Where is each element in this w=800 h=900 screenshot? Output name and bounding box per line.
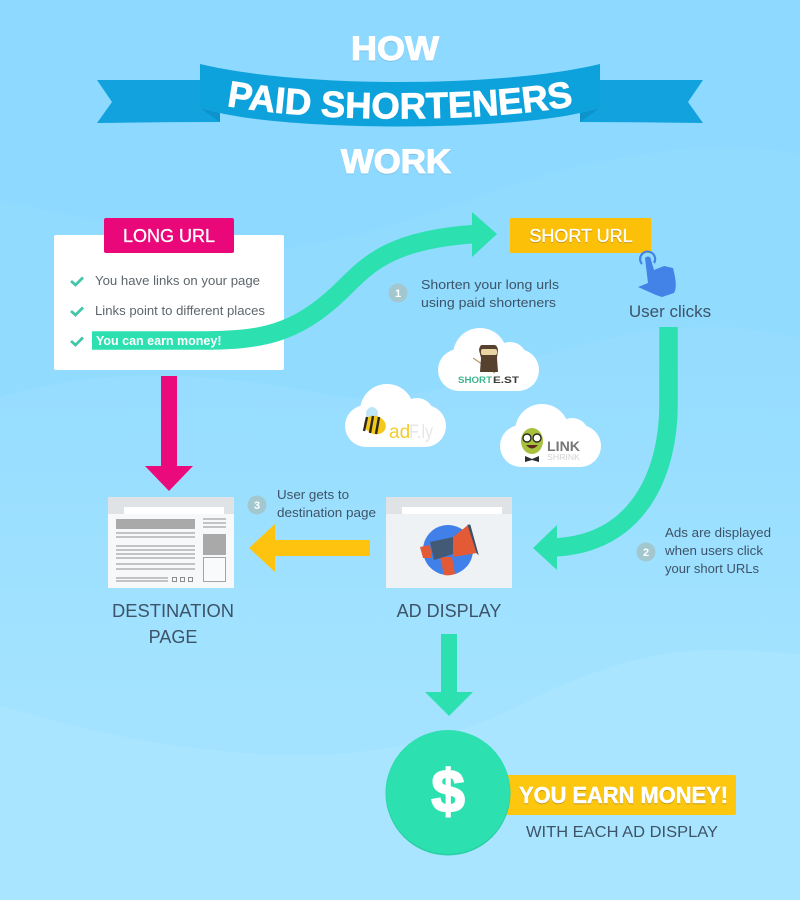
step 3 note: destination page	[277, 505, 376, 520]
coin: dollar	[386, 730, 510, 856]
cloud: adf.ly	[345, 384, 446, 447]
step 1 note: Shorten your long urls	[421, 277, 560, 292]
cloud: adf.ly: ad	[389, 422, 410, 443]
step 2 note	[636, 525, 771, 576]
step 3 note: User gets to	[277, 487, 349, 502]
highlight text: You can earn money!	[96, 334, 222, 348]
icon: tapping hand	[638, 252, 676, 297]
cloud: shorte.st: E.ST	[493, 375, 519, 386]
title: PAID SHORTENERS: PAID SHORTENERS	[228, 81, 572, 120]
label: destination page	[112, 601, 234, 647]
step 2 note: when users click	[664, 543, 764, 558]
text: user clicks: User clicks	[629, 302, 711, 321]
step 1 note	[388, 277, 560, 310]
text: with each ad display: WITH EACH AD DISPLAY	[526, 824, 718, 841]
check list item 2: Links point to different places	[95, 303, 265, 318]
step 3 note	[248, 487, 376, 520]
arrow: long URL to short URL	[92, 212, 497, 340]
step 2 note: Ads are displayed	[665, 525, 771, 540]
cloud: shorte.st: SHORT	[458, 375, 492, 386]
step 2 note: your short URLs	[665, 561, 759, 576]
banner: you earn money: YOU EARN MONEY!	[519, 782, 728, 808]
banner: you earn money	[500, 775, 736, 815]
arrow: ad display to destination	[249, 524, 370, 572]
cloud: linkshrink	[500, 404, 601, 467]
label: destination page: PAGE	[149, 627, 197, 647]
cloud: linkshrink: LINK	[547, 438, 580, 454]
panel: destination page browser	[108, 497, 234, 588]
step 1 note: 1	[395, 288, 401, 300]
label: short URL: SHORT URL	[529, 226, 633, 246]
arrow: long URL to destination page	[145, 376, 193, 491]
step 2 note: 2	[643, 547, 649, 559]
long url label	[104, 218, 234, 253]
cloud: adf.ly: F.ly	[409, 422, 433, 443]
label: ad display: AD DISPLAY	[397, 601, 501, 621]
arrow: ad display to money	[425, 634, 473, 716]
panel: ad display browser	[386, 497, 512, 588]
icon: megaphone	[420, 525, 478, 575]
label: short URL	[510, 218, 651, 253]
long url label: LONG URL	[123, 226, 215, 246]
coin: dollar: $	[431, 758, 465, 825]
check mark 3	[71, 338, 83, 345]
step 1 note: using paid shorteners	[421, 295, 557, 310]
panel: long URL card	[54, 218, 284, 370]
cloud: shorte.st	[438, 328, 539, 391]
arrow: user clicks to ad display	[533, 327, 668, 570]
cloud: linkshrink: SHRINK	[547, 453, 581, 462]
title: HOW: HOW	[351, 30, 440, 68]
check list item 1: You have links on your page	[95, 273, 260, 288]
step 3 note: 3	[254, 500, 260, 512]
title: WORK: WORK	[341, 143, 451, 181]
label: destination page: DESTINATION	[112, 601, 234, 621]
title ribbon	[97, 64, 703, 126]
